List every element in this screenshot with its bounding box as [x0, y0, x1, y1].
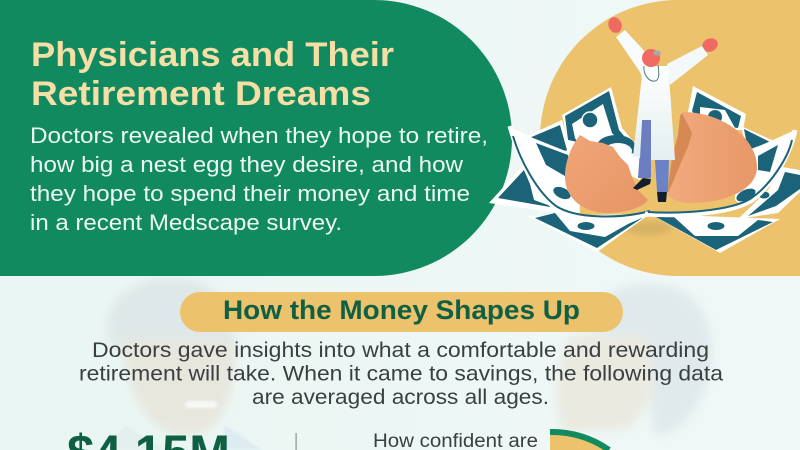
curled bill edges [510, 126, 795, 219]
right hand glove [700, 36, 720, 54]
section intro text: Doctors gave insights into what a comfortable and rewarding [92, 338, 709, 362]
bill: curled left centre [512, 128, 580, 216]
trousers left [638, 120, 651, 178]
shoe right [657, 192, 667, 202]
hair [653, 50, 661, 56]
bill: curled right centre [733, 130, 795, 205]
intro text [30, 123, 488, 235]
section heading pill: How the Money Shapes Up [223, 295, 580, 325]
coat arms [616, 30, 648, 85]
title: Retirement Dreams [31, 75, 371, 113]
ground shadow [624, 221, 672, 235]
doctor figure [606, 15, 720, 202]
title [31, 36, 394, 113]
trousers right [655, 160, 669, 192]
bill: left back [514, 120, 572, 164]
egg shell: left half [565, 135, 648, 213]
left hand glove [606, 15, 624, 35]
stethoscope [644, 65, 659, 81]
bill: far left [489, 163, 568, 212]
intro text: Doctors revealed when they hope to retire, [30, 123, 488, 148]
bill: far right [738, 167, 800, 219]
bill: bottom right [650, 214, 780, 253]
bill: top right [688, 86, 776, 155]
illustration: doctor hatching from an egg on dollar bills [489, 15, 800, 253]
intro text: in a recent Medscape survey. [30, 210, 342, 235]
egg shell: right half [668, 112, 757, 203]
confidence gauge [550, 432, 609, 450]
faded photo: smiling woman [556, 284, 712, 435]
title: Physicians and Their [31, 36, 394, 74]
bill: top left [562, 87, 645, 180]
head [642, 49, 660, 67]
section intro text: are averaged across all ages. [252, 385, 549, 409]
green header panel [0, 0, 512, 276]
lab coat [633, 66, 675, 160]
shoe left [633, 178, 651, 190]
faded photo: smiling man [105, 278, 262, 450]
yellow circle panel [540, 0, 800, 276]
section intro text: retirement will take. When it came to savings, the following data [79, 362, 723, 386]
intro text: they hope to spend their money and time [30, 181, 470, 206]
section intro text [79, 338, 723, 409]
column divider [296, 433, 297, 450]
bill: bottom left [527, 213, 650, 252]
section heading pill [180, 292, 623, 332]
intro text: how big a nest egg they desire, and how [30, 152, 463, 177]
